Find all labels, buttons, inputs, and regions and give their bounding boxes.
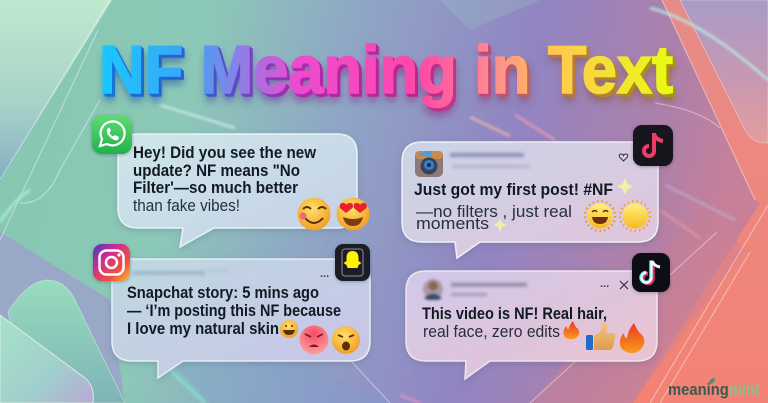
panel: Snapchat story message (93, 244, 370, 378)
icon: small fire (563, 321, 579, 339)
icon: Snapchat (335, 244, 370, 281)
speech bubble (112, 259, 370, 378)
message text: update? NF means "No (133, 162, 300, 180)
title: NF Meaning in Text (99, 32, 673, 108)
icon: sparkles (493, 178, 634, 232)
icon: heart (619, 154, 628, 161)
message text: —no filters , just real (416, 202, 572, 221)
message text: moments (416, 214, 489, 233)
panel: Instagram post message (402, 125, 673, 258)
speech bubble (406, 271, 657, 379)
menu dots: ... (320, 268, 329, 280)
speech bubble (118, 134, 357, 247)
icon: thumbs up (586, 323, 615, 350)
panel: TikTok video message (406, 253, 670, 379)
logo: meaningmint: meaningmint (668, 381, 760, 399)
message text (422, 305, 607, 341)
icon: weary emoji (332, 326, 360, 354)
icon: sun (620, 201, 650, 231)
panel: WhatsApp message (92, 115, 370, 247)
menu dots: ... (600, 278, 609, 290)
icon: Instagram (93, 244, 130, 281)
blurred account name (133, 270, 230, 275)
message text (127, 284, 341, 338)
icon: large fire (620, 323, 644, 353)
icon: laughing sun emoji (585, 201, 615, 231)
message text: Hey! Did you see the new (133, 144, 316, 162)
message text: Snapchat story: 5 mins ago (127, 284, 319, 302)
message text: than fake vibes! (133, 197, 240, 215)
icon: red upset emoji (300, 326, 328, 354)
message text: I love my natural skin (127, 320, 279, 338)
icon: TikTok dark (633, 125, 673, 166)
blurred account name (450, 153, 530, 168)
icon: WhatsApp (92, 115, 132, 154)
icon: camera (415, 151, 443, 177)
icon: grinning emoji (280, 320, 298, 338)
message text (414, 180, 613, 233)
message text: real face, zero edits (423, 323, 560, 341)
close icon (620, 281, 628, 289)
message text: Filter'—so much better (133, 179, 299, 197)
message text: — ‘I’m posting this NF because (127, 302, 341, 320)
speech bubble (402, 142, 658, 258)
message text (133, 144, 316, 215)
icon: TikTok (632, 253, 670, 292)
blurred account name (451, 283, 527, 296)
avatar (423, 279, 443, 300)
message text: This video is NF! Real hair, (422, 305, 607, 323)
icon: smiling blushing emoji (298, 198, 330, 230)
message text: Just got my first post! #NF (414, 180, 613, 199)
icon: heart eyes emoji (336, 198, 370, 230)
